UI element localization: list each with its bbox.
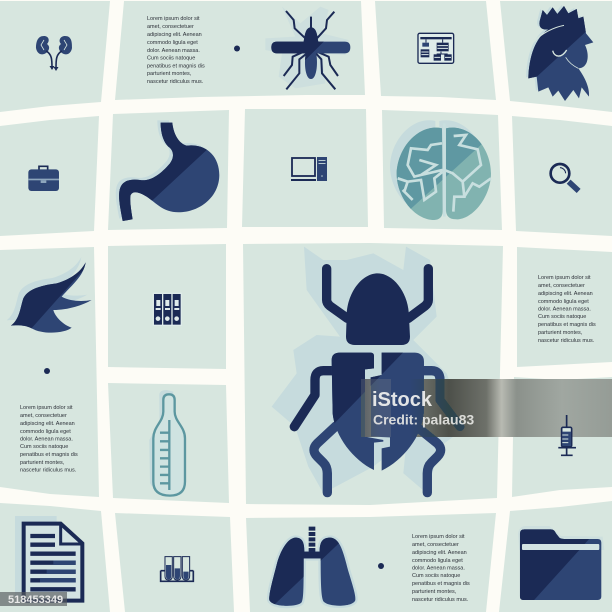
text block bottom: Lorem ipsum dolor sit	[412, 534, 465, 540]
panel: folder	[499, 501, 612, 612]
watermark credit: Credit: palau83	[373, 412, 474, 428]
image id tag: 518453349	[8, 594, 63, 606]
panel: org chart	[375, 1, 496, 100]
icon: brain	[390, 120, 491, 220]
text block bottom: Cum sociis natoque	[412, 573, 460, 579]
stomach shadow	[116, 120, 216, 219]
panel: stomach	[108, 110, 229, 230]
text block bottom: adipiscing elit. Aenean	[412, 550, 467, 556]
bug antennae	[327, 269, 428, 318]
binder 3	[173, 294, 181, 325]
panel: bug	[243, 243, 503, 505]
text block bottom: dolor. Aenean massa.	[412, 566, 465, 572]
thermometer shadow	[149, 390, 173, 493]
watermark logo: iStock	[372, 389, 433, 411]
panel: computer	[242, 109, 368, 227]
text block bottom: nascetur ridiculus mus.	[412, 597, 469, 603]
text block right: dolor. Aenean massa.	[538, 306, 591, 312]
icon: kidneys	[36, 36, 72, 71]
icon: document	[15, 516, 82, 601]
text block top: Cum sociis natoque	[147, 56, 195, 62]
rooster shadow	[526, 5, 584, 91]
panel: wing and text	[0, 247, 99, 497]
text block top: parturient montes,	[147, 71, 192, 77]
icon: stomach	[116, 120, 219, 221]
document shadow	[15, 516, 57, 596]
text block top: penatibus et magnis dis	[147, 64, 205, 70]
icon: magnifier	[551, 164, 579, 191]
text block right: nascetur ridiculus mus.	[538, 338, 595, 344]
text block bottom: commodo ligula eget	[412, 558, 463, 564]
panel: test tubes	[115, 513, 234, 612]
panel: syringe	[512, 377, 612, 497]
icon: thermometer	[149, 390, 185, 496]
panel: text and mosquito	[115, 1, 365, 100]
wing shadow	[7, 257, 87, 323]
brain shadow	[390, 120, 484, 213]
text block left: adipiscing elit. Aenean	[20, 421, 75, 427]
icon: bug	[272, 247, 467, 493]
text block left: commodo ligula eget	[20, 429, 71, 435]
panel: thermometer	[108, 383, 229, 503]
panel: kidneys	[0, 1, 110, 112]
lungs halo	[269, 538, 355, 606]
bug legs	[294, 371, 333, 427]
text block bottom: parturient montes,	[412, 589, 457, 595]
icon: wing	[7, 257, 92, 333]
panel: rooster	[500, 1, 612, 112]
binder 1	[154, 294, 162, 325]
icon: binders	[153, 293, 182, 326]
text block right: Lorem ipsum dolor sit	[538, 275, 591, 281]
bug right wing case	[371, 353, 424, 471]
icon: org chart	[418, 33, 454, 63]
bug left wing case	[332, 353, 383, 470]
text block right: parturient montes,	[538, 330, 583, 336]
icon: computer	[291, 157, 327, 181]
text block left: penatibus et magnis dis	[20, 452, 78, 458]
icon: folder	[518, 526, 604, 600]
mosquito shadow	[265, 7, 349, 88]
mosquito legs	[284, 11, 338, 89]
text block left: Lorem ipsum dolor sit	[20, 405, 73, 411]
text block top: commodo ligula eget	[147, 40, 198, 46]
panel: document	[0, 503, 110, 612]
bug head	[346, 273, 410, 345]
text block left: amet, consectetuer	[20, 413, 67, 419]
icon: rooster	[526, 5, 593, 101]
text block left: dolor. Aenean massa.	[20, 436, 73, 442]
text block left: Cum sociis natoque	[20, 444, 68, 450]
icon: lungs	[269, 527, 355, 606]
trachea	[302, 527, 322, 552]
icon: briefcase	[28, 166, 59, 191]
text block top: amet, consectetuer	[147, 24, 194, 30]
text block top: dolor. Aenean massa.	[147, 48, 200, 54]
text block right: commodo ligula eget	[538, 299, 589, 305]
panel: brain	[382, 110, 502, 230]
icon: test tubes	[161, 557, 193, 581]
lung shapes	[269, 538, 355, 606]
text block right: adipiscing elit. Aenean	[538, 291, 593, 297]
text block bottom: penatibus et magnis dis	[412, 581, 470, 587]
panel: magnifier	[512, 116, 612, 236]
panel: briefcase	[0, 116, 99, 236]
bug shadow	[272, 247, 467, 493]
watermark band	[361, 379, 612, 437]
dots	[44, 46, 384, 569]
panel: lungs and text	[246, 513, 496, 612]
panel: text right	[517, 247, 612, 367]
text block bottom: amet, consectetuer	[412, 542, 459, 548]
text block top: nascetur ridiculus mus.	[147, 79, 204, 85]
icon: syringe	[558, 415, 576, 455]
text block right: Cum sociis natoque	[538, 314, 586, 320]
text block left: nascetur ridiculus mus.	[20, 468, 77, 474]
text block top: Lorem ipsum dolor sit	[147, 16, 200, 22]
text block left: parturient montes,	[20, 460, 65, 466]
text block right: amet, consectetuer	[538, 283, 585, 289]
text block right: penatibus et magnis dis	[538, 322, 596, 328]
mosquito body	[271, 27, 350, 79]
icon: mosquito	[265, 7, 350, 89]
text block top: adipiscing elit. Aenean	[147, 32, 202, 38]
binder 2	[163, 294, 171, 325]
panel: binders	[108, 244, 226, 369]
